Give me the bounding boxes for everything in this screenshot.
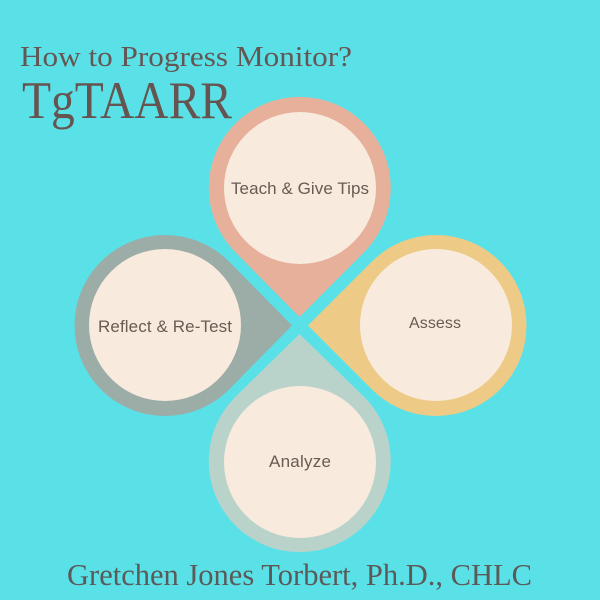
panel: reflect and re-test: [75, 235, 292, 416]
label: assess: Assess: [409, 315, 461, 332]
label: analyze: Analyze: [269, 452, 331, 471]
circle: reflect: [89, 249, 241, 401]
circle: teach: [224, 112, 376, 264]
panel: assess: [308, 235, 526, 416]
heading: TgTAARR: TgTAARR: [22, 72, 233, 130]
teardrop: reflect: [75, 235, 292, 416]
panel: analyze: [209, 334, 391, 552]
title: How to Progress Monitor?: How to Progress Monitor?: [20, 41, 352, 73]
circle: analyze: [224, 386, 376, 538]
teardrop: teach: [209, 97, 391, 317]
teardrop: analyze: [209, 334, 391, 552]
label: teach: Teach & Give Tips: [231, 179, 369, 198]
label: reflect: Reflect & Re-Test: [98, 317, 232, 336]
panel: teach and give tips: [209, 97, 391, 317]
teardrop: assess: [308, 235, 526, 416]
author credit: Gretchen Jones Torbert, Ph.D., CHLC: [67, 557, 532, 592]
circle: assess: [360, 249, 512, 401]
